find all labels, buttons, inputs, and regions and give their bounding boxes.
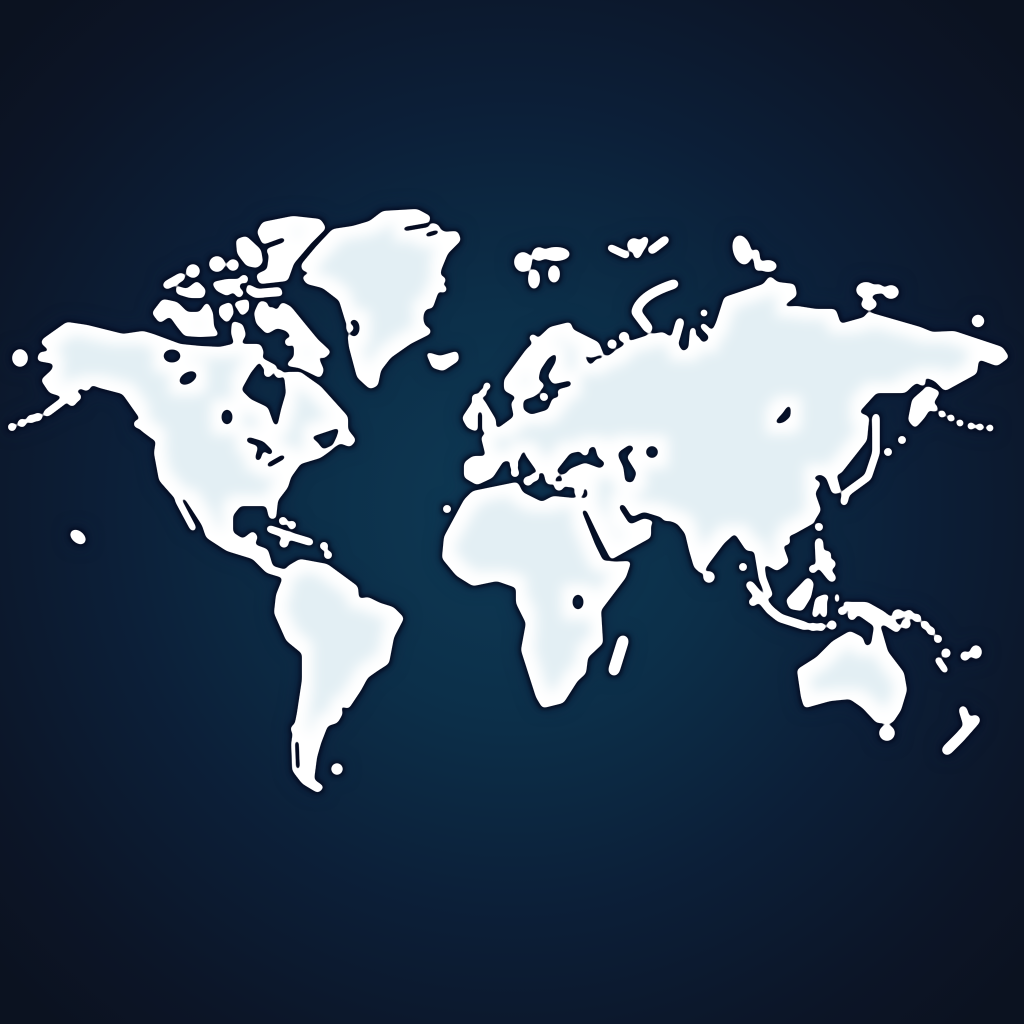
novaya zemlya and yamal [636, 284, 715, 367]
ellesmere island [257, 217, 325, 283]
greenland dots [347, 277, 446, 331]
europe small islands [472, 332, 628, 496]
canary dot [444, 506, 450, 512]
australia [798, 627, 906, 722]
iceland [427, 352, 458, 370]
hawaii [69, 528, 87, 546]
chile and falklands dots [292, 726, 342, 774]
north america [38, 323, 355, 578]
franz josef land [611, 239, 665, 255]
british isles [463, 400, 495, 432]
canadian arctic archipelago [153, 237, 330, 378]
eurasia [465, 277, 1008, 598]
aleutian islands and alaska dots [8, 350, 90, 430]
glowing land masses [8, 210, 1008, 792]
new siberian islands [857, 283, 984, 326]
madagascar [614, 641, 623, 670]
japan [844, 417, 906, 502]
severnaya zemlya [731, 234, 776, 271]
continents with lakes cut out [38, 210, 1008, 792]
tasmania [880, 726, 894, 740]
kamchatka and kuril islands [909, 379, 993, 431]
south america [275, 560, 403, 792]
svalbard [515, 248, 569, 288]
africa [443, 483, 630, 707]
pacific island chain [893, 610, 981, 670]
greenland [302, 210, 460, 388]
west coast and baja [134, 420, 193, 528]
new zealand [947, 710, 975, 750]
caribbean islands [270, 518, 332, 558]
southeast asia islands [704, 524, 856, 630]
new guinea [843, 602, 900, 632]
